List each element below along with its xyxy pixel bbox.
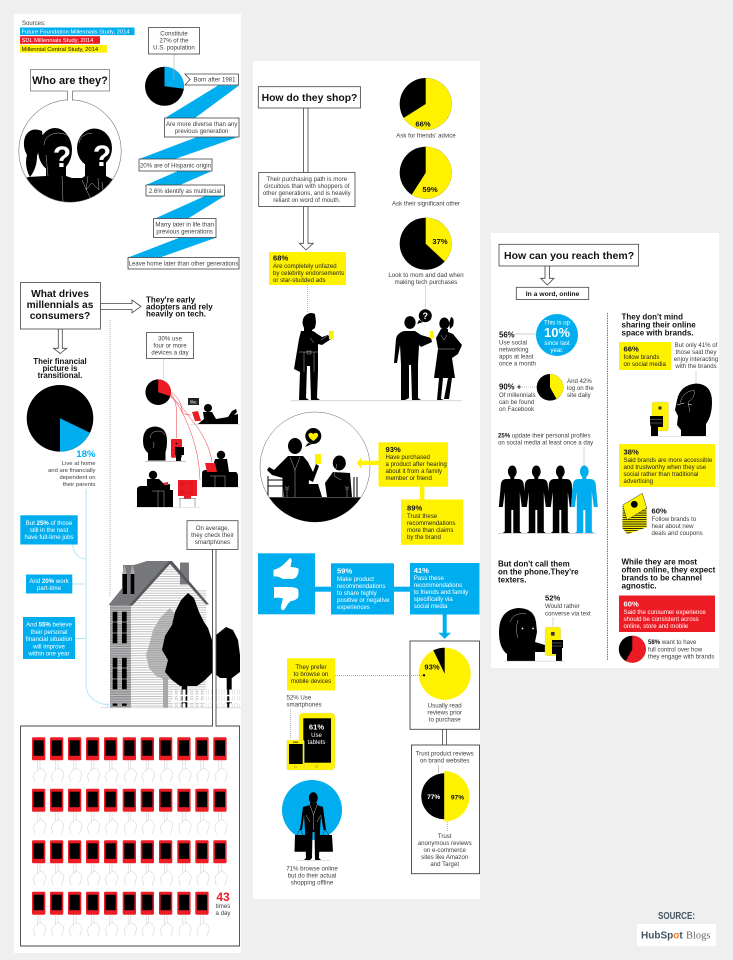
callout: 59 percent recommendations: 59% <box>337 566 352 576</box>
callout: 55 percent improve: And 55% believe <box>26 622 72 628</box>
heading: who are they: Who are they? <box>32 75 108 87</box>
icon: tablet 61 percent <box>299 713 335 770</box>
callout: 55 percent improve <box>23 617 75 659</box>
callout: 38 percent accessible: 38% <box>624 448 639 456</box>
stat: 41 percent enjoy interacting <box>674 342 718 383</box>
subheading: early adopters: They're early <box>146 296 196 304</box>
callout: 41 percent social media <box>410 563 480 614</box>
illustration: head texting with yellow phone <box>499 608 565 661</box>
panel: how can you reach them <box>491 233 719 668</box>
stat: 43 times a day: a day <box>216 910 231 917</box>
pie: 37 percent mom and dad: Look to mom and dad when <box>388 272 464 279</box>
subheading: channel agnostic: agnostic. <box>622 582 657 590</box>
stat: 18 percent: 18% <box>76 449 96 460</box>
arrow: from stat to dinner scene <box>357 457 378 469</box>
subheading: financial picture <box>33 357 87 380</box>
illustration: two silhouettes with question marks: ? <box>53 141 71 174</box>
stat: 52 percent smartphones: 52% Use <box>286 694 312 702</box>
pie: 27 percent of population <box>145 54 184 106</box>
callout: 89 percent trust: recommendations <box>407 520 455 527</box>
connector between review boxes <box>442 729 446 745</box>
callout: 93 percent purchased: member or friend <box>386 475 432 482</box>
callout: 59 percent recommendations: positive or negative <box>337 597 390 604</box>
arrow: to financial section <box>54 329 67 354</box>
subheading: channel agnostic: often online, they expect <box>622 566 716 574</box>
callout: 20 percent part-time: part-time <box>37 585 62 592</box>
smartphone check count frame <box>20 549 240 946</box>
connector lines to house <box>72 489 109 707</box>
callout: 59 percent recommendations: experiences <box>337 604 370 611</box>
stat: 42 percent log on daily: log on the <box>567 385 594 392</box>
picket fence <box>171 690 240 708</box>
heading: how do they shop <box>258 87 360 108</box>
panel: brand and anonymous reviews <box>412 745 480 874</box>
subheading: early adopters <box>146 296 213 318</box>
panel: who are they and what drives millennials <box>14 14 241 953</box>
illustration: man with phone and glasses <box>294 313 334 400</box>
text: purchasing path: reliant on word of mouth. <box>273 197 341 204</box>
pie: 37 percent mom and dad <box>388 218 464 286</box>
callout: 68 percent unfazed: Are completely unfazed <box>273 263 337 270</box>
callout: 93 percent purchased: about it from a family <box>386 468 443 475</box>
stat: 52 percent text <box>545 594 591 627</box>
heading: what drives millennials: millennials as <box>27 300 94 311</box>
callout: 41 percent social media: 41% <box>414 566 429 575</box>
panel: brand and anonymous reviews: Trust <box>438 833 452 840</box>
subheading: sharing online space: They don't mind <box>622 312 683 322</box>
panel: reviews 93 percent: Usually read <box>428 702 462 710</box>
callout: 30 percent use devices <box>146 332 194 379</box>
sources legend <box>20 21 134 53</box>
callout: prefer browse on mobile: They prefer <box>295 664 327 671</box>
pie: 59 percent significant other: 59% <box>422 185 438 194</box>
icon: head with red phone <box>143 426 186 461</box>
stat: 18 percent: their parents <box>63 482 96 488</box>
panel: reviews 93 percent <box>410 641 480 729</box>
gray background tree <box>146 608 180 708</box>
pie: 58 percent control <box>619 636 646 663</box>
heading: what drives millennials: consumers? <box>30 311 90 322</box>
panel: reviews 93 percent: to purchase <box>429 716 461 724</box>
icon: person on sofa with laptop <box>202 451 240 488</box>
fact: hispanic origin: 20% are of Hispanic origin <box>140 162 211 169</box>
icon: person lying with tablet <box>188 398 240 424</box>
stat: 42 percent log on daily <box>567 378 594 399</box>
callout: constitute 27 percent <box>148 28 200 54</box>
panel: brand and anonymous reviews: Trust product reviews <box>416 750 474 757</box>
stat: 56 percent social networking: networking <box>499 346 528 354</box>
stat: 60 percent deals and coupons: 60% <box>652 506 667 516</box>
panel: brand and anonymous reviews: on brand websites <box>420 757 469 764</box>
callout: 38 percent accessible <box>619 444 715 487</box>
callout: 30 percent use devices: four or more <box>153 343 187 350</box>
dashed column divider <box>606 313 608 661</box>
badge: up 10 percent: This is up <box>544 320 571 326</box>
label: in a word, online: In a word, online <box>526 291 580 298</box>
icon: tablet 61 percent: Use <box>311 732 323 739</box>
stat: 25 percent update profiles <box>498 432 594 466</box>
pie: 42 percent daily <box>537 374 563 401</box>
stat: 58 percent full control: full control over how <box>648 646 703 653</box>
stat: 60 percent deals and coupons <box>652 506 703 537</box>
sources legend: Millennial Central Study, 2014 <box>22 47 99 53</box>
stat: 52 percent smartphones: smartphones <box>286 702 322 709</box>
heading: what drives millennials: What drives <box>31 289 89 300</box>
text: purchasing path: other generations, and is heavily <box>263 190 352 197</box>
callout: 93 percent purchased: a product after hearing <box>386 461 447 468</box>
stat: 52 percent smartphones <box>286 694 322 739</box>
callout: 59 percent recommendations: Make product <box>337 576 374 583</box>
callout: 60 percent consistent <box>619 596 715 632</box>
pie: 59 percent significant other <box>392 147 460 208</box>
callout: prefer browse on mobile: to browse on <box>294 671 328 678</box>
illustration: couple with question bubble: ? <box>423 311 428 321</box>
callout: 59 percent recommendations: recommendations <box>337 583 385 590</box>
stat: 71 percent browse online: shopping offline <box>291 880 334 886</box>
pie: 30 percent four devices <box>145 379 171 405</box>
fact: marry later: Marry later in life than <box>155 222 214 228</box>
badge: up 10 percent: since last <box>544 340 570 347</box>
icon grid: 43 smartphones with hands <box>32 737 227 937</box>
callout: 41 percent social media: specifically via <box>414 596 453 603</box>
fact: hispanic origin <box>139 159 212 171</box>
heading: who are they <box>30 70 110 100</box>
black right tree <box>210 627 240 708</box>
badge: up 10 percent <box>536 314 578 356</box>
callout: on average check smartphones: they check their <box>191 532 234 539</box>
callout: 30 percent use devices: 30% use <box>158 336 182 343</box>
subheading: financial picture: Their financial <box>33 357 87 366</box>
panel: reviews 93 percent: 93% <box>424 662 440 672</box>
callout: 20 percent part-time: And 20% work <box>29 578 70 585</box>
pictogram: four people one blue <box>498 466 598 534</box>
callout: 25 percent full-time: still in the nest <box>30 527 69 534</box>
sources legend: Future Foundation Millennials Study, 2014 <box>22 29 130 35</box>
heading: how can you reach them: How can you reach them? <box>504 250 634 262</box>
dotted divider <box>109 320 111 597</box>
pie: 66 percent friends advice: 66% <box>415 120 431 128</box>
subheading: channel agnostic: brands to be channel <box>622 574 702 582</box>
callout: 89 percent trust: 89% <box>407 504 422 512</box>
callout: on average check smartphones: smartphones <box>195 539 230 546</box>
callout: 25 percent full-time: But 25% of those <box>26 520 73 527</box>
callout: 93 percent purchased <box>378 442 448 487</box>
stat: 18 percent <box>48 449 96 488</box>
stat: 60 percent deals and coupons: deals and coupons <box>652 530 703 537</box>
panel: brand and anonymous reviews: anonymous reviews <box>418 840 472 847</box>
panel: brand and anonymous reviews: 77% <box>427 794 440 801</box>
text: purchasing path: circuitous than with shoppers of <box>264 183 350 190</box>
icon: person lying with tablet: like <box>190 400 197 405</box>
subheading: texters: on the phone.They're <box>498 568 579 576</box>
callout: 66 percent follow brands: 66% <box>624 344 639 354</box>
panel: brand and anonymous reviews: sites like Amazon <box>421 854 468 861</box>
source credit: HubSpot <box>641 930 683 942</box>
arrow: blue down to reviews <box>438 614 451 639</box>
callout: 38 percent accessible: social rather than traditional <box>624 471 698 478</box>
stat: 18 percent: and are financially <box>48 468 96 474</box>
callout: 25 percent full-time <box>20 515 78 544</box>
stat: 56 percent social networking: apps at least <box>499 354 534 360</box>
subheading: sharing online space: sharing their online <box>622 320 696 330</box>
callout: 55 percent improve: financial situation <box>26 636 72 643</box>
fact: more diverse: Are more diverse than any <box>166 121 238 128</box>
stat: 41 percent enjoy interacting: enjoy interacting <box>674 356 718 363</box>
callout: 66 percent follow brands <box>619 342 671 370</box>
stat: 43 times a day <box>216 890 231 917</box>
stat: 90 percent on facebook: 90% + <box>499 382 522 392</box>
stat: 41 percent enjoy interacting: But only 41% of <box>675 342 718 349</box>
callout: 93 percent purchased: 93% <box>386 445 401 454</box>
stat: 71 percent browse online <box>286 865 338 886</box>
icon: tablet 61 percent: tablets <box>308 739 325 746</box>
callout: prefer browse on mobile: mobile devices <box>291 678 331 685</box>
callout: 38 percent accessible: advertising <box>624 478 653 485</box>
stat: 56 percent social networking: Use social <box>499 340 527 346</box>
callout: 41 percent social media: to friends and family <box>414 589 469 596</box>
icon: stack of coupons <box>622 493 647 534</box>
text: purchasing path <box>259 172 355 206</box>
stat: 42 percent log on daily: site daily <box>567 392 592 399</box>
red device connector lines <box>170 391 212 480</box>
callout: 60 percent consistent: 60% <box>624 600 639 608</box>
panel: reviews 93 percent: reviews prior <box>427 710 462 716</box>
illustration: house with trees <box>100 561 241 708</box>
callout: constitute 27 percent: Constitute <box>160 30 188 38</box>
subheading: financial picture: picture is <box>42 364 78 373</box>
illustration: two silhouettes with question marks <box>16 100 122 210</box>
heading: how can you reach them <box>499 244 638 266</box>
stat: 52 percent text: 52% <box>545 594 560 602</box>
dotted connectors to figures <box>308 285 426 312</box>
callout: 89 percent trust: by the brand <box>407 534 441 541</box>
panel: brand and anonymous reviews: and Target <box>430 861 459 868</box>
panel: how do they shop <box>253 61 480 899</box>
stat: 52 percent text: converse via text <box>545 610 591 617</box>
arrow: heading down to online <box>541 266 554 285</box>
illustration: shopper with bags in blue circle <box>282 780 342 861</box>
callout: 55 percent improve: their personal <box>31 629 67 636</box>
dashed leader from mobile callout to pie <box>335 674 425 676</box>
connector between yellow callouts <box>420 486 424 500</box>
source credit: SOURCE: <box>658 911 695 922</box>
fact: marry later <box>154 218 216 238</box>
subheading: channel agnostic: While they are most <box>622 558 697 566</box>
stat: 58 percent full control: 58% want to have <box>648 639 697 646</box>
pie: 18 percent live at home <box>27 385 93 452</box>
sources legend: Sources: <box>22 21 46 27</box>
stat: 56 percent social networking <box>499 330 537 368</box>
callout: 20 percent part-time <box>26 574 72 594</box>
stat: 25 percent update profiles: 25% update their personal profiles <box>498 432 590 440</box>
fact: leave home later <box>128 258 239 269</box>
callout: 59 percent recommendations: to share highly <box>337 590 378 597</box>
callout: 38 percent accessible: Said brands are more accessible <box>624 457 713 464</box>
sources legend: SDL Millennials Study, 2014 <box>22 38 94 44</box>
stat: 43 times a day: times <box>216 903 230 910</box>
callout: 93 percent purchased: Have purchased <box>386 454 430 461</box>
fact: born after 1981 <box>185 74 238 85</box>
callout: 66 percent follow brands: on social media <box>624 361 666 368</box>
connector bars between blue boxes <box>315 587 410 592</box>
subheading: early adopters: adopters and rely <box>146 302 213 312</box>
panel: brand and anonymous reviews: 97% <box>451 794 464 801</box>
woman figure <box>434 317 462 400</box>
callout: 68 percent unfazed <box>269 252 346 285</box>
callout: 30 percent use devices: devices a day <box>151 350 190 357</box>
callout: on average check smartphones: On average, <box>196 525 230 532</box>
badge: up 10 percent: year. <box>550 347 564 354</box>
stat: 56 percent social networking: once a month <box>499 360 536 368</box>
callout: 41 percent social media: recommendations <box>414 582 462 589</box>
subheading: early adopters: heavily on tech. <box>146 310 206 318</box>
icon: tablet 61 percent: 61% <box>309 722 324 732</box>
callout: 66 percent follow brands: follow brands <box>624 354 659 361</box>
stat: 90 percent on facebook <box>499 382 537 413</box>
fact: marry later: previous generations <box>156 229 213 236</box>
label: in a word, online <box>516 287 589 300</box>
pie: 66 percent friends advice <box>396 78 456 139</box>
callout: 60 percent consistent: should be consistent across <box>624 616 699 623</box>
icon: thumbs up and down <box>258 553 315 614</box>
callout: 41 percent social media: social media <box>414 603 448 610</box>
callout: 55 percent improve: within one year <box>28 650 70 658</box>
fact: more diverse: previous generation <box>175 128 228 135</box>
stat: 60 percent deals and coupons: Follow brands to <box>652 516 697 523</box>
illustration: couple with question bubble <box>291 309 462 401</box>
stat: 60 percent deals and coupons: hear about new <box>652 523 694 530</box>
text: purchasing path: Their purchasing path is more <box>266 176 348 183</box>
stat: 58 percent full control: they engage with brands <box>648 654 714 660</box>
stat: 90 percent on facebook: on Facebook <box>499 406 535 413</box>
pie: 37 percent mom and dad: 37% <box>432 237 448 246</box>
stat: 52 percent text: Would rather <box>545 603 580 610</box>
panel: brand and anonymous reviews: on e-commerce <box>424 847 466 854</box>
subheading: channel agnostic <box>622 558 716 590</box>
stat: 58 percent full control <box>648 639 714 660</box>
stat: 41 percent enjoy interacting: those said they <box>676 349 717 356</box>
icon: smartphone yellow <box>287 740 304 770</box>
stat: 90 percent on facebook: can be found <box>499 399 534 406</box>
fact: leave home later: Leave home later than other generations <box>129 261 238 268</box>
source credit <box>637 911 716 946</box>
callout: 89 percent trust: more than claims <box>407 527 453 534</box>
fact: multiracial <box>146 185 224 196</box>
stat: 18 percent: dependent on <box>59 475 96 481</box>
callout: 68 percent unfazed: 68% <box>273 254 288 262</box>
fact: more diverse <box>164 118 239 137</box>
pie: 37 percent mom and dad: making tech purchases <box>395 279 457 286</box>
icon: person on sofa watching tv <box>135 471 200 508</box>
stat: 71 percent browse online: 71% browse online <box>286 865 338 872</box>
callout: prefer browse on mobile <box>287 658 335 690</box>
stat: 56 percent social networking: 56% <box>499 330 515 340</box>
callout: 55 percent improve: will improve <box>32 643 66 650</box>
illustration: two silhouettes with question marks: ? <box>93 140 111 173</box>
subheading: texters: texters. <box>498 576 526 584</box>
stat: 43 times a day: 43 <box>216 890 230 904</box>
zigzag ribbon of facts <box>128 86 239 258</box>
connector arrows down the shop column <box>299 108 313 250</box>
callout: 89 percent trust <box>401 500 463 545</box>
subheading: sharing online space: space with brands. <box>622 328 694 338</box>
fact: multiracial: 2.6% identify as multiracial <box>149 188 221 195</box>
pie: 66 percent friends advice: Ask for friends' advice <box>396 132 456 139</box>
callout: 68 percent unfazed: or star-studded ads <box>273 277 326 284</box>
heading: what drives millennials <box>20 282 100 329</box>
stat: 42 percent log on daily: And 42% <box>567 378 592 385</box>
callout: constitute 27 percent: U.S. population <box>153 44 195 52</box>
callout: 60 percent consistent: online, store and mobile <box>624 623 689 630</box>
source credit: Blogs <box>686 930 711 942</box>
callout: 59 percent recommendations <box>331 563 394 614</box>
stat: 18 percent: Live at home <box>62 461 96 467</box>
illustration: dinner scene in circle <box>257 412 373 527</box>
stat: 41 percent enjoy interacting: with the brands <box>674 363 717 370</box>
callout: 41 percent social media: Pass these <box>414 575 444 582</box>
callout: 68 percent unfazed: by celebrity endorsements <box>273 270 344 277</box>
black foreground tree <box>162 593 213 708</box>
badge: up 10 percent: 10% <box>544 325 570 340</box>
callout: 38 percent accessible: and trustworthy when they use <box>624 464 707 471</box>
callout: 89 percent trust: Trust these <box>407 513 438 520</box>
callout: 60 percent consistent: Said the consumer experience <box>624 609 706 616</box>
callout: 25 percent full-time: have full-time jobs <box>24 534 74 541</box>
subheading: texters: But don't call them <box>498 560 570 568</box>
pie: 59 percent significant other: Ask their significant other <box>392 201 460 208</box>
stat: 71 percent browse online: but do their actual <box>288 872 336 879</box>
subheading: texters <box>498 560 579 584</box>
callout: constitute 27 percent: 27% of the <box>159 38 189 44</box>
subheading: sharing online space <box>622 312 696 338</box>
fact: born after 1981: Born after 1981 <box>194 76 236 84</box>
stat: 90 percent on facebook: Of millennials <box>499 392 536 399</box>
arrow: to tech section <box>100 300 141 313</box>
callout: on average check smartphones <box>187 521 238 550</box>
heading: how do they shop: How do they shop? <box>262 93 357 104</box>
subheading: financial picture: transitional. <box>38 371 82 380</box>
stat: 25 percent update profiles: on social media at least once a day <box>498 440 594 446</box>
illustration: profile head with yellow phone <box>650 384 712 436</box>
